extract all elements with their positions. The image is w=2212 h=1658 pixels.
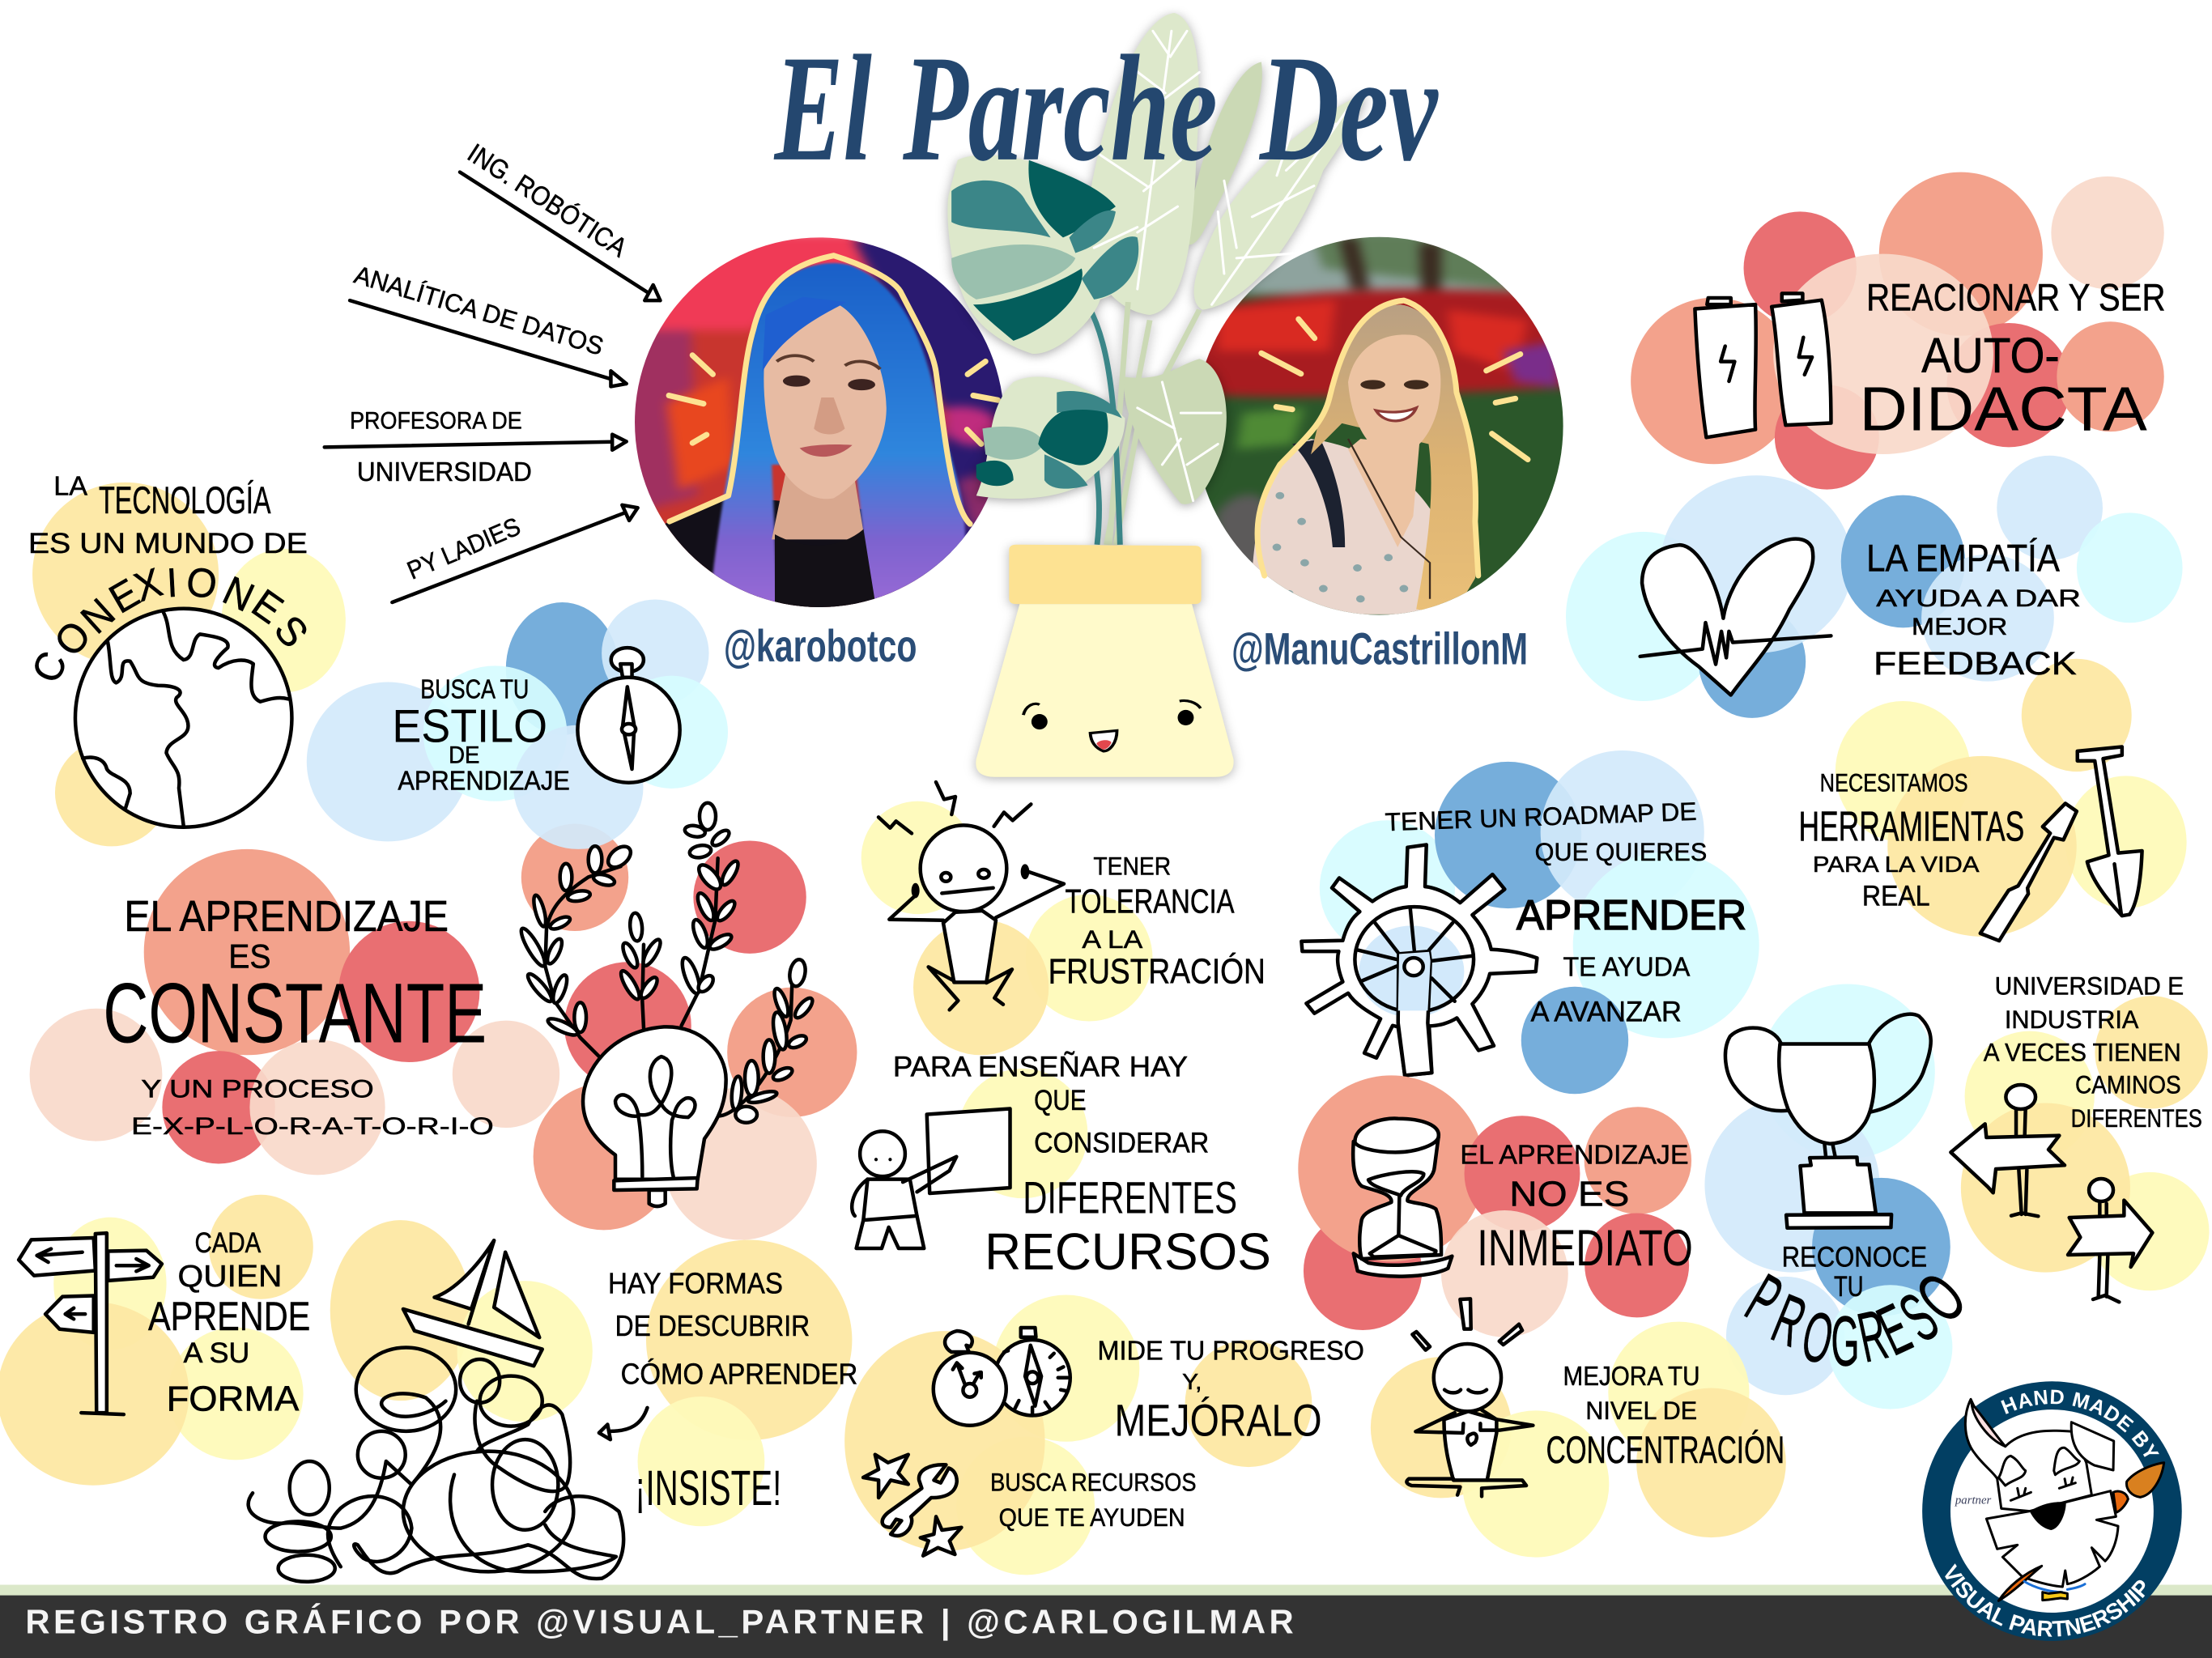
icon: batteries [1695, 294, 1831, 437]
text: tener tolerancia a la frustración: FRUSTRACIÓN [1049, 951, 1266, 991]
illustration: potted plant with kawaii face [947, 13, 1367, 777]
text: el aprendizaje no es inmediato [1460, 1140, 1693, 1277]
icon: shovel and screwdriver [1980, 746, 2142, 941]
text: tener un roadmap de que quieres aprender: APRENDER [1516, 892, 1746, 939]
text: cada quien aprende a su forma: APRENDE [148, 1293, 310, 1339]
panel: empatía [1566, 456, 2183, 718]
arrow: py ladies [392, 505, 638, 602]
text: conexiones arc: X [129, 559, 168, 610]
text: necesitamos herramientas para la vida real: NECESITAMOS [1820, 768, 1968, 797]
text: progreso arc: O [1796, 1295, 1840, 1379]
text: mejora tu nivel de concentración: NIVEL DE [1585, 1397, 1697, 1425]
text: progreso arc: O [1902, 1259, 1980, 1337]
text: cada quien aprende a su forma: A SU [184, 1337, 249, 1369]
text: para enseñar hay que considerar diferentes recursos [893, 1051, 1271, 1281]
text: la tecnología es un mundo de: ES UN MUNDO DE [28, 528, 308, 559]
badge: hand made by visual partnership [1922, 1381, 2182, 1641]
text: tener tolerancia a la frustración: A LA [1082, 925, 1142, 954]
panel: el aprendizaje es constante [30, 849, 559, 1175]
text: hay formas de descubrir cómo aprender: ¡INSISTE! [635, 1460, 781, 1516]
text: la empatía ayuda a dar mejor feedback: MEJOR [1912, 614, 2007, 640]
leaf veins [1094, 31, 1348, 501]
title: Parche [902, 23, 1218, 193]
text: tener un roadmap de que quieres aprender: QUE QUIERES [1535, 838, 1707, 866]
arrow: profesora de universidad [325, 435, 627, 450]
panel: estilo de aprendizaje [307, 600, 728, 931]
text: necesitamos herramientas para la vida real: HERRAMIENTAS [1798, 803, 2024, 850]
text: conexiones arc: N [72, 590, 124, 643]
text: conexiones arc: I [165, 560, 179, 606]
pot [976, 545, 1234, 777]
text: tener un roadmap de que quieres aprender [1385, 797, 1746, 1027]
photo outline and rays [669, 256, 998, 524]
pot face [1023, 700, 1201, 751]
photo outline and rays [1257, 300, 1528, 576]
text: ing. robótica: ING. ROBÓTICA [462, 138, 633, 264]
text: necesitamos herramientas para la vida real: REAL [1862, 881, 1930, 912]
text: hay formas de descubrir cómo aprender: CÓMO APRENDER [621, 1357, 857, 1390]
text: universidad e industria a veces tienen caminos diferentes: UNIVERSIDAD E [1995, 971, 2184, 1000]
icon: signpost [19, 1233, 162, 1414]
text: busca tu estilo de aprendizaje: DE [449, 742, 479, 769]
text: reacionar y ser autodidacta: AUTO- [1921, 328, 2060, 383]
text: progreso arc: P [1734, 1259, 1795, 1340]
text: reconoce tu: RECONOCE [1782, 1242, 1927, 1273]
icon: ship wheel [1301, 844, 1537, 1075]
text: constante: EL APRENDIZAJE [124, 892, 449, 941]
text: mide tu progreso y mejóralo: Y, [1182, 1369, 1202, 1394]
badge ring text: HAND MADE BY [2001, 1389, 2159, 1457]
text: cada quien aprende a su forma [148, 1227, 310, 1418]
panel: tolerancia a la frustración [861, 782, 1266, 1055]
badge ring text: VISUAL PARTNERSHIP [1945, 1563, 2146, 1637]
text: conexiones arc: C [23, 644, 76, 690]
panel: herramientas [1798, 659, 2187, 941]
text: el aprendizaje no es inmediato: INMEDIATO [1477, 1220, 1693, 1277]
arrow: analítica de datos [350, 300, 627, 386]
footer bar [0, 1585, 2212, 1658]
text: reacionar y ser autodidacta [1859, 275, 2166, 444]
text: profesora de: PROFESORA DE [350, 408, 522, 435]
text: para enseñar hay que considerar diferentes recursos: DIFERENTES [1023, 1172, 1237, 1222]
text: busca tu estilo de aprendizaje: ESTILO [392, 700, 547, 752]
icon: hourglass [1353, 1119, 1452, 1277]
text: constante: ES [228, 937, 271, 975]
panel: tecnología y conexiones [23, 472, 346, 846]
text: mide tu progreso y mejóralo [990, 1337, 1364, 1532]
icon: stars and wrench [863, 1455, 961, 1556]
text: la empatía ayuda a dar mejor feedback: FEEDBACK [1874, 646, 2077, 682]
icon: meditating figure [1406, 1299, 1533, 1496]
panel: universidad e industria [1950, 971, 2210, 1302]
text: conexiones arc: E [102, 570, 147, 623]
handle: @ManuCastrillonM: @ManuCastrillonM [1231, 624, 1528, 674]
text: mejora tu nivel de concentración: CONCENTRACIÓN [1546, 1428, 1784, 1471]
text: progreso arc [1734, 1259, 1980, 1380]
icon: stopwatch and compass [934, 1328, 1070, 1426]
panel: el aprendizaje no es inmediato [1298, 1075, 1693, 1337]
text: conexiones arc: O [184, 559, 219, 608]
text: constante: CONSTANTE [103, 967, 487, 1061]
panel: mide tu progreso [844, 1295, 1364, 1575]
text: para enseñar hay que considerar diferentes recursos: RECURSOS [985, 1222, 1271, 1281]
text: conexiones arc [23, 559, 317, 690]
handle: @karobotco: @karobotco [724, 621, 917, 671]
text: para enseñar hay que considerar diferentes recursos: CONSIDERAR [1034, 1128, 1209, 1159]
icon: compass [577, 648, 680, 783]
title [773, 23, 1439, 193]
text: hay formas de descubrir cómo aprender: DE DESCUBRIR [615, 1309, 810, 1342]
text: tener un roadmap de que quieres aprender: TE AYUDA [1563, 953, 1691, 983]
icon: heart with ecg line [1640, 539, 1831, 695]
icon: teacher at board [852, 1109, 1010, 1248]
icon: dog mascot with brush [1965, 1399, 2164, 1601]
text: progreso arc: E [1866, 1288, 1922, 1371]
text: universidad e industria a veces tienen caminos diferentes: A VECES TIENEN [1984, 1038, 2181, 1066]
text: progreso arc: R [1763, 1278, 1817, 1362]
text: tener un roadmap de que quieres aprender: A AVANZAR [1530, 996, 1682, 1027]
icon: direction arrows [1950, 1085, 2152, 1302]
text: hay formas de descubrir cómo aprender [608, 1267, 857, 1516]
text: reconoce tu: TU [1834, 1271, 1864, 1303]
partnership mini logo: partner [1955, 1494, 1992, 1507]
arrow: ing. robótica [460, 172, 660, 300]
text: busca tu estilo de aprendizaje [392, 674, 570, 797]
footer credit text: REGISTRO GRÁFICO POR @VISUAL_PARTNER | @CARLOGILMAR [25, 1603, 1294, 1642]
panel: reconoce tu progreso [1704, 984, 1980, 1409]
icon: globe [75, 609, 291, 827]
text: mide tu progreso y mejóralo: BUSCA RECURSOS [990, 1469, 1197, 1497]
text: universidad e industria a veces tienen caminos diferentes: CAMINOS [2075, 1070, 2181, 1099]
text: cada quien aprende a su forma: CADA [194, 1227, 262, 1259]
text: para enseñar hay que considerar diferentes recursos: PARA ENSEÑAR HAY [893, 1051, 1188, 1082]
text: conexiones arc: O [45, 612, 100, 665]
text: tener tolerancia a la frustración: TOLERANCIA [1065, 882, 1235, 920]
text: universidad: UNIVERSIDAD [357, 457, 532, 487]
text: el aprendizaje no es inmediato: EL APRENDIZAJE [1460, 1140, 1689, 1170]
text: la tecnología es un mundo de: TECNOLOGÍA [99, 478, 271, 521]
text: tener tolerancia a la frustración: TENER [1093, 852, 1171, 880]
panel: mejora tu concentración [1371, 1299, 1786, 1558]
text: la empatía ayuda a dar mejor feedback [1866, 537, 2081, 682]
icon: trophy [1725, 1014, 1931, 1228]
title: Dev [1258, 23, 1439, 193]
text: para enseñar hay que considerar diferentes recursos: QUE [1034, 1085, 1087, 1116]
panel: bombilla con ramas [517, 803, 857, 1240]
text: la empatía ayuda a dar mejor feedback: LA EMPATÍA [1866, 537, 2060, 580]
panel: autodidacta [1631, 172, 2166, 490]
title: El [773, 23, 872, 193]
text: mide tu progreso y mejóralo: QUE TE AYUDEN [999, 1503, 1185, 1532]
text: mide tu progreso y mejóralo: MIDE TU PROGRESO [1098, 1337, 1364, 1367]
text: tener tolerancia a la frustración [1049, 852, 1266, 991]
text: constante: Y UN PROCESO [141, 1075, 374, 1103]
leaves with soft shadow [947, 13, 1367, 545]
icon: frustrated figure [878, 782, 1064, 1010]
panel: roadmap [1301, 750, 1759, 1094]
panel: para enseñar hay que considerar [852, 1051, 1271, 1281]
text: busca tu estilo de aprendizaje: APRENDIZAJE [398, 767, 570, 797]
text: analítica de datos: ANALÍTICA DE DATOS [351, 261, 606, 361]
text: universidad e industria a veces tienen caminos diferentes: INDUSTRIA [2005, 1005, 2138, 1034]
text: busca tu estilo de aprendizaje: BUSCA TU [420, 674, 529, 704]
text: constante: E-X-P-L-O-R-A-T-O-R-I-O [131, 1113, 494, 1140]
text: el aprendizaje no es inmediato: NO ES [1509, 1175, 1629, 1214]
text: cada quien aprende a su forma: QUIEN [178, 1259, 282, 1294]
text: mejora tu nivel de concentración: MEJORA TU [1563, 1362, 1700, 1392]
text: conexiones arc: N [216, 568, 261, 621]
text: progreso arc: S [1886, 1278, 1951, 1357]
panel: cada quien aprende [0, 1195, 313, 1486]
text: conexiones arc: S [266, 607, 317, 657]
text: necesitamos herramientas para la vida real [1798, 768, 2024, 912]
text: la tecnología es un mundo de: LA [53, 472, 88, 502]
text: conexiones arc: E [244, 580, 291, 633]
text: constante [103, 892, 494, 1140]
text: la empatía ayuda a dar mejor feedback: AYUDA A DAR [1876, 585, 2081, 612]
icon: lightbulb with branches [517, 803, 815, 1206]
text: reacionar y ser autodidacta: REACIONAR Y SER [1866, 275, 2166, 318]
text: mejora tu nivel de concentración [1546, 1362, 1784, 1471]
text: progreso arc: G [1831, 1302, 1860, 1380]
text: progreso arc: R [1852, 1295, 1894, 1377]
photo: ManuCastrillonM portrait [1205, 236, 1563, 615]
panel: credenciales de karobotco [325, 138, 660, 602]
photo: karobotco portrait [635, 237, 1002, 607]
text: mide tu progreso y mejóralo: MEJÓRALO [1114, 1396, 1322, 1446]
text: reacionar y ser autodidacta: DIDACTA [1859, 375, 2147, 444]
text: la tecnología es un mundo de [28, 472, 308, 559]
text: universidad e industria a veces tienen caminos diferentes [1984, 971, 2202, 1133]
panel: hay formas de descubrir [249, 1220, 857, 1582]
badge ring text [1945, 1389, 2159, 1637]
text: tener un roadmap de que quieres aprender: TENER UN ROADMAP DE [1385, 797, 1697, 836]
text: necesitamos herramientas para la vida real: PARA LA VIDA [1813, 852, 1980, 877]
text: reconoce tu [1782, 1242, 1927, 1303]
icon: tangled line and paper boat [249, 1240, 647, 1582]
text: cada quien aprende a su forma: FORMA [167, 1380, 299, 1418]
text: hay formas de descubrir cómo aprender: HAY FORMAS [608, 1267, 783, 1300]
text: py ladies: PY LADIES [403, 512, 525, 585]
